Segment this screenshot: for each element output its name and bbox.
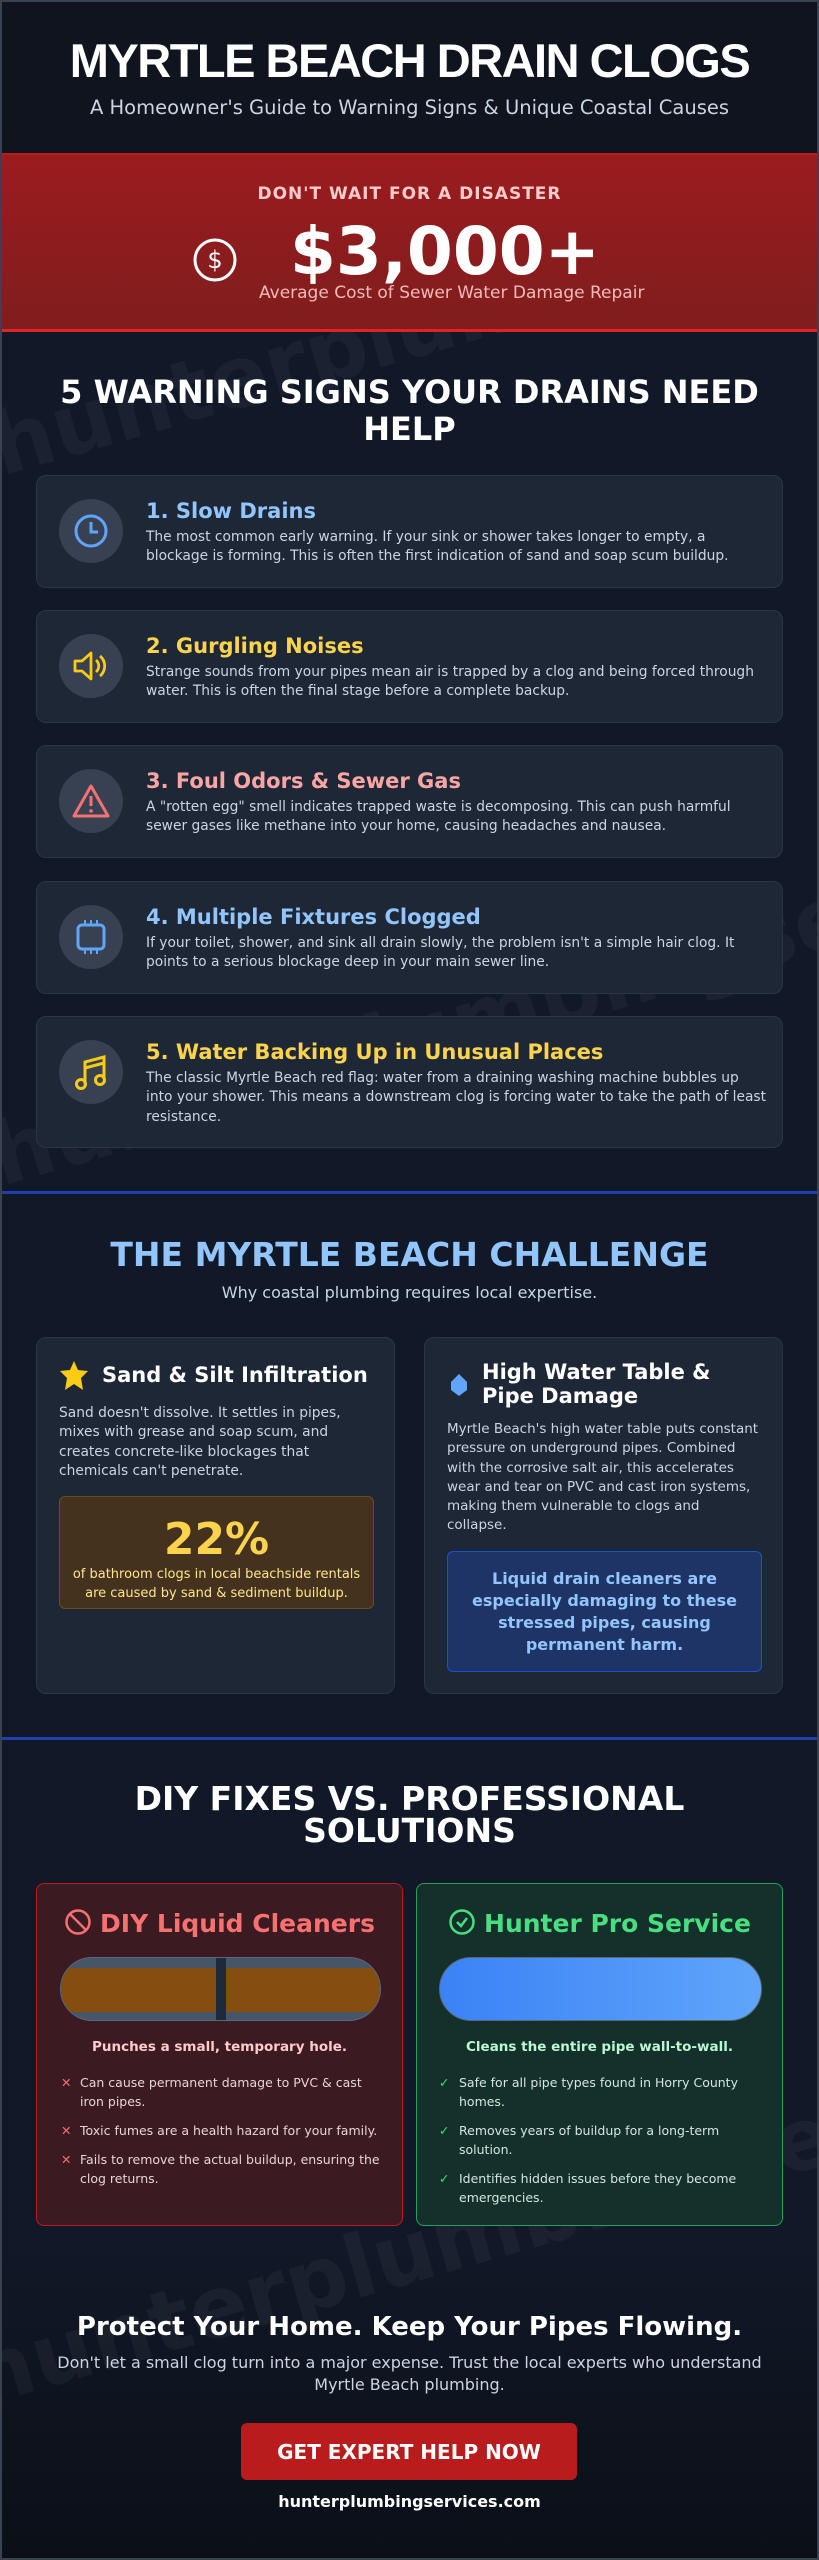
pro list: ✓ xyxy=(439,2171,449,2186)
pro list: Identifies hidden issues before they become emergencies. xyxy=(459,2171,736,2205)
diy title: DIY Liquid Cleaners xyxy=(100,1909,375,1938)
header xyxy=(0,0,819,153)
icon: music xyxy=(59,1040,123,1104)
panel title: High Water Table & xyxy=(482,1360,710,1384)
card: gurgling: Strange sounds from your pipes mean air is trapped by a clog and being forced through xyxy=(146,664,754,680)
icon: star xyxy=(60,1361,88,1390)
card: backing up: resistance. xyxy=(146,1109,221,1125)
footer text: Don't let a small clog turn into a major expense. Trust the local experts who understand Myrtle Beach plumbing. xyxy=(57,2353,762,2394)
banner label: DON'T WAIT FOR A DISASTER xyxy=(257,184,562,204)
diy list: ✕ xyxy=(61,2075,71,2090)
panel title: Pipe Damage xyxy=(482,1384,638,1408)
diy list: ✕ xyxy=(61,2152,71,2167)
card: multiple fixtures xyxy=(36,881,783,994)
card: backing up: The classic Myrtle Beach red flag: water from a draining washing machine bubbles up xyxy=(146,1070,739,1086)
panel text: with the corrosive salt air, this accelerates xyxy=(447,1460,734,1476)
diy caption: Punches a small, temporary hole. xyxy=(92,2039,347,2055)
icon: clock xyxy=(59,499,123,563)
card: gurgling: 2. Gurgling Noises xyxy=(146,634,364,658)
diy list: Can cause permanent damage to PVC & cast iron pipes. xyxy=(80,2075,362,2109)
heading: challenge: THE MYRTLE BEACH CHALLENGE xyxy=(110,1235,709,1274)
card: slow drains: 1. Slow Drains xyxy=(146,499,316,523)
panel text xyxy=(447,1421,758,1533)
panel: sand xyxy=(36,1337,395,1694)
card: gurgling xyxy=(36,610,783,723)
panel text: Myrtle Beach's high water table puts constant xyxy=(447,1421,758,1437)
panel title: Sand & Silt Infiltration xyxy=(102,1363,368,1387)
heading: diy vs pro: DIY FIXES VS. PROFESSIONAL xyxy=(135,1779,684,1818)
card: gurgling: water. This is often the final stage before a complete backup. xyxy=(146,683,569,699)
pro list: Removes years of buildup for a long-term solution. xyxy=(459,2123,719,2157)
card: odors: sewer gases like methane into your home, causing headaches and nausea. xyxy=(146,818,666,834)
card: backing up: 5. Water Backing Up in Unusual Places xyxy=(146,1040,603,1064)
pro title: Hunter Pro Service xyxy=(484,1909,751,1938)
card: odors xyxy=(36,745,783,858)
callout: Liquid drain cleaners are especially damaging to these stressed pipes, causing permanent harm. xyxy=(472,1568,737,1654)
stat box: are caused by sand & sediment buildup. xyxy=(85,1586,348,1601)
panel: diy xyxy=(36,1883,403,2226)
panel text: pressure on underground pipes. Combined xyxy=(447,1440,735,1456)
card: odors: 3. Foul Odors & Sewer Gas xyxy=(146,769,461,793)
heading: diy vs pro: SOLUTIONS xyxy=(303,1811,516,1850)
diy list: Fails to remove the actual buildup, ensuring the clog returns. xyxy=(80,2152,380,2186)
icon: speaker xyxy=(59,634,123,698)
big number: $3,000+ xyxy=(290,213,600,290)
icon: dollar xyxy=(194,238,236,282)
panel text: chemicals can't penetrate. xyxy=(59,1463,243,1479)
panel text: collapse. xyxy=(447,1517,507,1533)
panel text: creates concrete-like blockages that xyxy=(59,1444,309,1460)
panel text: Sand doesn't dissolve. It settles in pipes, xyxy=(59,1405,341,1421)
cost banner xyxy=(0,153,819,332)
heading: warning signs: 5 WARNING SIGNS YOUR DRAINS NEED xyxy=(60,373,759,411)
card: backing up xyxy=(36,1016,783,1148)
card: odors: A "rotten egg" smell indicates trapped waste is decomposing. This can push harmful xyxy=(146,799,731,815)
card: slow drains: The most common early warning. If your sink or shower takes longer to empty, a xyxy=(146,529,705,545)
cta button: GET EXPERT HELP NOW xyxy=(277,2440,541,2464)
stat box xyxy=(59,1496,374,1609)
heading: diy vs pro xyxy=(135,1779,684,1850)
card: multiple fixtures: points to a serious blockage deep in your main sewer line. xyxy=(146,954,549,970)
card: backing up: into your shower. This means a downstream clog is forcing water to take the path of least xyxy=(146,1089,766,1105)
stat box: 22% xyxy=(164,1514,269,1565)
card: multiple fixtures: If your toilet, shower, and sink all drain slowly, the problem isn't a simple hair clog. It xyxy=(146,935,734,951)
icon: warning xyxy=(59,769,123,833)
card: slow drains: blockage is forming. This is often the first indication of sand and soap scum buildup. xyxy=(146,548,729,564)
panel: water table xyxy=(424,1337,783,1694)
pro list: ✓ xyxy=(439,2123,449,2138)
panel text xyxy=(59,1405,341,1479)
panel text: wear and tear on PVC and cast iron systems, xyxy=(447,1479,750,1495)
footer title: Protect Your Home. Keep Your Pipes Flowing. xyxy=(77,2312,742,2342)
diy list: ✕ xyxy=(61,2123,71,2138)
pro caption: Cleans the entire pipe wall-to-wall. xyxy=(466,2039,733,2055)
pro list xyxy=(439,2075,738,2205)
panel text: mixes with grease and soap scum, and xyxy=(59,1424,328,1440)
heading: warning signs xyxy=(60,373,759,448)
heading: warning signs: HELP xyxy=(363,410,456,448)
panel title xyxy=(482,1360,710,1408)
diy list xyxy=(61,2075,380,2186)
challenge subtitle: Why coastal plumbing requires local expertise. xyxy=(222,1283,597,1302)
panel text: making them vulnerable to clogs and xyxy=(447,1498,699,1514)
card: multiple fixtures: 4. Multiple Fixtures Clogged xyxy=(146,905,481,929)
subtitle: A Homeowner's Guide to Warning Signs & Unique Coastal Causes xyxy=(90,96,729,119)
callout xyxy=(447,1551,762,1672)
pipe: clean xyxy=(439,1957,762,2021)
pro list: Safe for all pipe types found in Horry County homes. xyxy=(459,2075,738,2109)
url: hunterplumbingservices.com xyxy=(278,2492,541,2511)
banner caption: Average Cost of Sewer Water Damage Repair xyxy=(259,283,644,303)
icon: dollar: $ xyxy=(207,246,223,274)
icon: drop xyxy=(451,1374,467,1396)
panel: pro xyxy=(416,1883,783,2226)
pipe: clogged xyxy=(60,1957,381,2021)
stat box: of bathroom clogs in local beachside rentals xyxy=(73,1567,360,1582)
pro list: ✓ xyxy=(439,2075,449,2090)
cta button xyxy=(241,2423,577,2480)
title: MYRTLE BEACH DRAIN CLOGS xyxy=(70,34,749,87)
diy list: Toxic fumes are a health hazard for your family. xyxy=(80,2123,377,2138)
card: slow drains xyxy=(36,475,783,588)
icon: chip xyxy=(59,905,123,969)
